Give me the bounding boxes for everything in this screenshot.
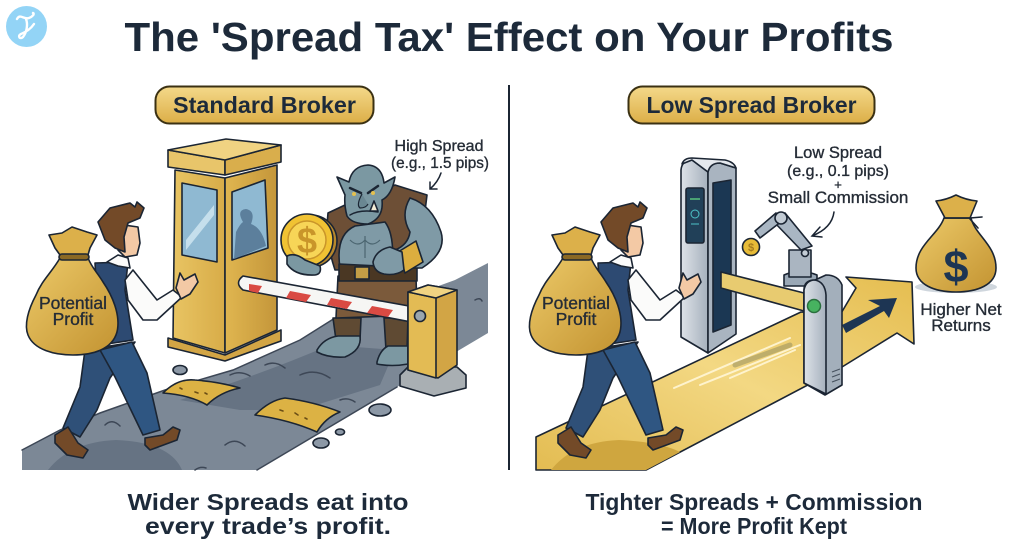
heading: standard broker: Standard Broker <box>173 92 356 118</box>
road ground shadow <box>551 440 680 470</box>
icon: logo badge <box>6 6 47 47</box>
troll belt <box>339 264 417 281</box>
label: low spread <box>768 144 908 207</box>
caption: standard: Wider Spreads eat into <box>128 489 408 515</box>
head <box>118 225 140 257</box>
robot arm <box>742 212 817 286</box>
money bag: Potential <box>39 293 107 313</box>
troll hand <box>287 255 320 275</box>
label: high spread: (e.g., 1.5 pips) <box>391 155 489 172</box>
troll vest <box>327 185 427 270</box>
hand <box>176 273 198 299</box>
robot arm: $ <box>748 242 754 254</box>
boom barrier <box>238 276 433 325</box>
caption: low spread: Tighter Spreads + Commission <box>586 489 922 515</box>
troll feet <box>317 336 360 357</box>
money bag <box>26 227 118 355</box>
gate barrier <box>721 272 804 311</box>
heading: low spread broker <box>628 86 874 124</box>
gate screen <box>686 188 704 243</box>
panel: low spread broker <box>529 86 1002 539</box>
barrier post <box>400 285 466 396</box>
road darker patches and ground shadow <box>48 345 395 470</box>
road edges and cracks <box>22 299 482 470</box>
toll booth <box>168 139 281 361</box>
heading: low spread broker: Low Spread Broker <box>646 92 857 118</box>
panel: standard broker <box>22 86 489 539</box>
troll legs <box>333 318 361 340</box>
waistcoat <box>95 262 133 345</box>
speed bump 2 <box>255 398 340 432</box>
dark arrow <box>842 298 897 333</box>
caption: standard <box>128 489 408 539</box>
front leg <box>100 342 160 435</box>
hair <box>98 202 144 252</box>
back leg <box>63 342 135 437</box>
shoes <box>55 427 88 458</box>
booth windows <box>182 180 268 262</box>
title: The 'Spread Tax' Effect on Your Profits <box>124 14 893 60</box>
label: high spread: High Spread <box>395 138 483 155</box>
troll kilt <box>336 276 417 318</box>
troll arm <box>395 198 442 268</box>
divider <box>508 85 510 470</box>
speed bump 1 <box>163 380 240 405</box>
label: low spread: Small Commission <box>768 188 908 207</box>
label: low spread: Low Spread <box>794 144 882 162</box>
gate pillar <box>681 158 736 353</box>
caption: low spread <box>586 489 922 539</box>
troll chest <box>339 222 393 268</box>
heading: standard broker <box>156 86 374 124</box>
arrow: to troll <box>430 173 441 189</box>
arrow: to robot <box>812 212 834 237</box>
troll head <box>337 165 395 224</box>
money bag: Profit <box>53 309 94 329</box>
small rocks <box>173 366 391 448</box>
troll: $ <box>297 220 317 261</box>
label: higher net returns <box>920 300 1002 335</box>
character: man with bag <box>529 202 701 458</box>
label: low spread: + <box>834 177 842 192</box>
label: higher net returns: Returns <box>931 316 991 335</box>
pivot <box>414 310 426 322</box>
caption: low spread: = More Profit Kept <box>661 513 847 539</box>
money bag: higher net returns: $ <box>943 241 969 292</box>
rough road <box>22 263 488 470</box>
road speed lines <box>674 338 800 388</box>
caption: standard: every trade’s profit. <box>145 513 391 539</box>
troll <box>281 165 442 366</box>
gate slot <box>713 180 731 332</box>
label: low spread: (e.g., 0.1 pips) <box>787 163 889 180</box>
coin <box>285 215 337 267</box>
label: high spread <box>391 138 489 172</box>
golden road with arrow head <box>536 277 914 470</box>
character: man with bag <box>26 202 198 458</box>
shirt arm <box>125 270 182 320</box>
money bag: higher net returns <box>915 195 997 293</box>
gate post <box>804 275 842 395</box>
label: higher net returns: Higher Net <box>920 300 1002 319</box>
